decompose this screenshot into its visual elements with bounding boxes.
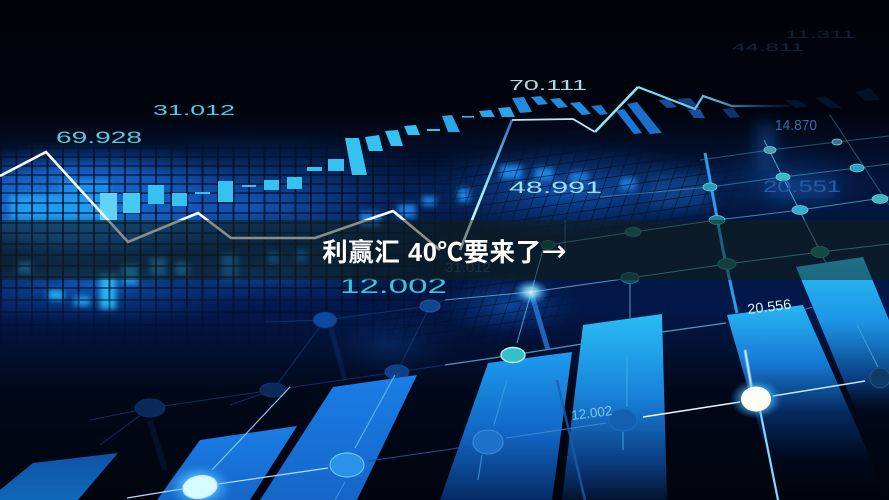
faint chart numbers right: 31.012 [445, 260, 491, 275]
bar: fourth [440, 352, 572, 500]
faint chart numbers right [445, 29, 855, 275]
chart numbers: 31.012 [153, 102, 235, 119]
faint chart numbers right: 44.811 [732, 42, 804, 54]
glowing node [513, 279, 549, 305]
blue glow behind grid [0, 130, 880, 380]
chart numbers: 12.002 [340, 275, 447, 298]
node rings on bars [330, 348, 889, 477]
candlestick bars [100, 88, 880, 220]
bar: sixth [727, 305, 889, 500]
perspective grid lines left [0, 147, 482, 334]
perspective grid lines right [433, 130, 749, 233]
small grid near lower node [366, 263, 574, 347]
bar: fifth [562, 314, 667, 500]
bright node bottom left [166, 463, 234, 500]
upper network nodes [541, 139, 888, 284]
number on bar fifth: 12.002 [571, 403, 613, 423]
number on bar sixth: 20.556 [746, 296, 792, 317]
blurred light spots [10, 165, 636, 309]
dim network lines left [90, 300, 445, 445]
chart numbers: 69.928 [56, 128, 142, 147]
bar: third [260, 375, 417, 500]
bar: far right [796, 257, 889, 420]
faint chart numbers right: 11.311 [785, 29, 855, 41]
chart numbers [56, 77, 602, 298]
title band [0, 220, 889, 280]
bar: second [157, 426, 297, 500]
bar: far left [0, 453, 118, 500]
soft right glow patches [650, 125, 835, 207]
blue thick beams [150, 153, 737, 470]
lower network lines [127, 325, 878, 500]
main price line [0, 87, 790, 250]
faint chart numbers right: 20.551 [763, 177, 841, 196]
chart numbers: 70.111 [509, 77, 587, 94]
title: 利赢汇 40℃要来了→ [322, 234, 567, 269]
faint chart numbers right: 14.870 [775, 117, 817, 134]
lower node rings dim [135, 300, 440, 417]
chart numbers: 48.991 [509, 178, 602, 197]
network lines [445, 115, 889, 367]
bright white node [730, 379, 782, 419]
